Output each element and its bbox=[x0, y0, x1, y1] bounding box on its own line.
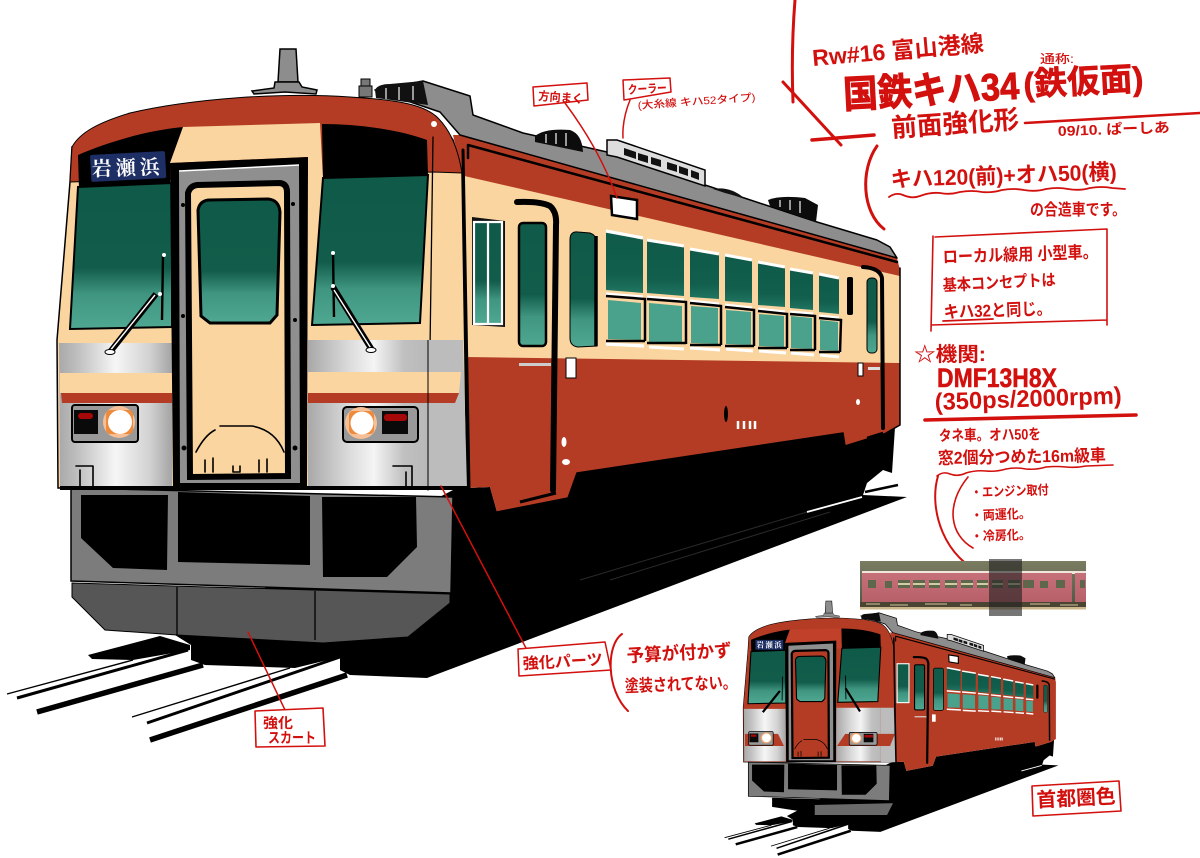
subtitle: front strengthened type: 前面強化形 bbox=[890, 104, 1020, 143]
title block rules bbox=[783, 0, 1200, 229]
modification list: ・エンジン取付 bbox=[971, 482, 1049, 500]
front side edge lines bbox=[428, 137, 433, 490]
ground shadow and underfloor bbox=[88, 427, 907, 678]
coupler hooks bbox=[76, 466, 412, 488]
small train side bbox=[861, 613, 1056, 771]
nickname label: 通称: bbox=[1040, 51, 1074, 66]
engine specification: DMF13H8X bbox=[937, 363, 1057, 393]
date and author: 09/10. ぱーしあ bbox=[1058, 119, 1170, 139]
note: base car: 窓2個分つめた16m級車 bbox=[938, 446, 1106, 468]
header dark areas bbox=[78, 127, 183, 190]
end window pair bbox=[472, 217, 505, 327]
train front body bbox=[57, 95, 467, 490]
destination sign: 岩瀬浜 bbox=[91, 151, 161, 182]
engine specification: ☆機関: bbox=[914, 343, 986, 366]
small train shadow and rails bbox=[725, 740, 1058, 855]
left headlight unit bbox=[72, 405, 138, 442]
note box: concept: 基本コンセプトは bbox=[942, 271, 1056, 295]
note: hybrid construction: の合造車です。 bbox=[1030, 201, 1126, 219]
center gangway door bbox=[170, 157, 308, 488]
side doors and fittings bbox=[517, 202, 883, 502]
red roof band bbox=[70, 95, 462, 182]
note: no paint budget: 予算が付かず bbox=[626, 640, 732, 666]
engine specification bbox=[914, 343, 1136, 420]
wipers bbox=[105, 251, 376, 354]
bumper and plates bbox=[60, 486, 468, 593]
roof vent 3 bbox=[768, 197, 818, 222]
note: hybrid construction: キハ120(前)+オハ50(横) bbox=[890, 159, 1117, 192]
label: strengthened skirt: スカート bbox=[268, 730, 316, 747]
modification list: ・冷房化。 bbox=[971, 527, 1031, 544]
coach windows bbox=[868, 580, 1085, 588]
door window bbox=[519, 223, 546, 346]
antenna bbox=[252, 49, 437, 127]
main train illustration bbox=[7, 49, 907, 740]
door window bbox=[198, 199, 280, 323]
center cream panel bbox=[170, 123, 323, 179]
roof vent 2 bbox=[535, 130, 583, 152]
right headlight unit bbox=[343, 407, 418, 442]
label: metropolitan colour: 首都圏色 bbox=[1036, 785, 1116, 812]
vertical slot bbox=[847, 277, 853, 315]
note: hybrid construction bbox=[889, 159, 1126, 219]
side windows bbox=[472, 217, 877, 357]
label: strengthened skirt bbox=[255, 708, 325, 747]
note: base car bbox=[937, 426, 1113, 476]
label: cooler: (大糸線 キハ52タイプ) bbox=[637, 91, 756, 112]
strengthened skirt bbox=[72, 583, 450, 643]
small train front bbox=[743, 601, 895, 815]
label: strengthened parts bbox=[518, 634, 628, 711]
small train: metropolitan colour variant bbox=[725, 601, 1058, 855]
title: iron mask nickname: (鉄仮面) bbox=[1022, 60, 1144, 103]
roof vent 1 bbox=[375, 81, 428, 105]
label: cooler bbox=[623, 78, 756, 112]
horn bbox=[359, 79, 372, 97]
note: no paint budget bbox=[624, 640, 737, 696]
seven window bank bbox=[606, 231, 841, 357]
reference photo of Oha 50 coach bbox=[860, 559, 1086, 616]
title: KiHa 34: 国鉄キハ34 bbox=[842, 66, 1020, 117]
left windshield bbox=[70, 183, 172, 329]
rollsign white box bbox=[611, 196, 637, 219]
label: strengthened parts: 強化パーツ bbox=[522, 651, 603, 673]
arrow to photo bbox=[935, 476, 990, 579]
right silver band bbox=[308, 340, 467, 488]
small train front: 岩瀬浜 bbox=[757, 641, 782, 651]
note box: concept: キハ32と同じ。 bbox=[943, 299, 1052, 322]
far door window bbox=[867, 278, 877, 353]
door lower arc bbox=[196, 426, 284, 472]
rails bbox=[7, 650, 347, 740]
modification list bbox=[953, 477, 1049, 548]
label: cooler: クーラー bbox=[627, 81, 667, 97]
label: metropolitan colour bbox=[1032, 781, 1121, 816]
train roof bbox=[359, 79, 897, 258]
note: no paint budget: 塗装されてない。 bbox=[624, 673, 737, 696]
label: rollsign: 方向まく bbox=[538, 88, 584, 106]
window behind door bbox=[570, 232, 597, 347]
air conditioner cooler bbox=[607, 140, 705, 186]
train side body bbox=[453, 135, 900, 512]
note box: concept: ローカル線用 小型車。 bbox=[942, 243, 1098, 267]
note: base car: タネ車。オハ50を bbox=[939, 426, 1041, 445]
label: strengthened skirt: 強化 bbox=[263, 715, 293, 731]
label: rollsign bbox=[533, 83, 588, 106]
note box: concept bbox=[931, 229, 1107, 331]
right windshield bbox=[312, 175, 428, 325]
engine specification: (350ps/2000rpm) bbox=[934, 382, 1122, 416]
left silver band bbox=[59, 343, 172, 486]
modification list: ・両運化。 bbox=[971, 506, 1031, 523]
title: series and line: Rw#16 富山港線 bbox=[811, 30, 985, 71]
front cream face bbox=[57, 118, 467, 488]
annotation leader lines bbox=[248, 100, 630, 710]
